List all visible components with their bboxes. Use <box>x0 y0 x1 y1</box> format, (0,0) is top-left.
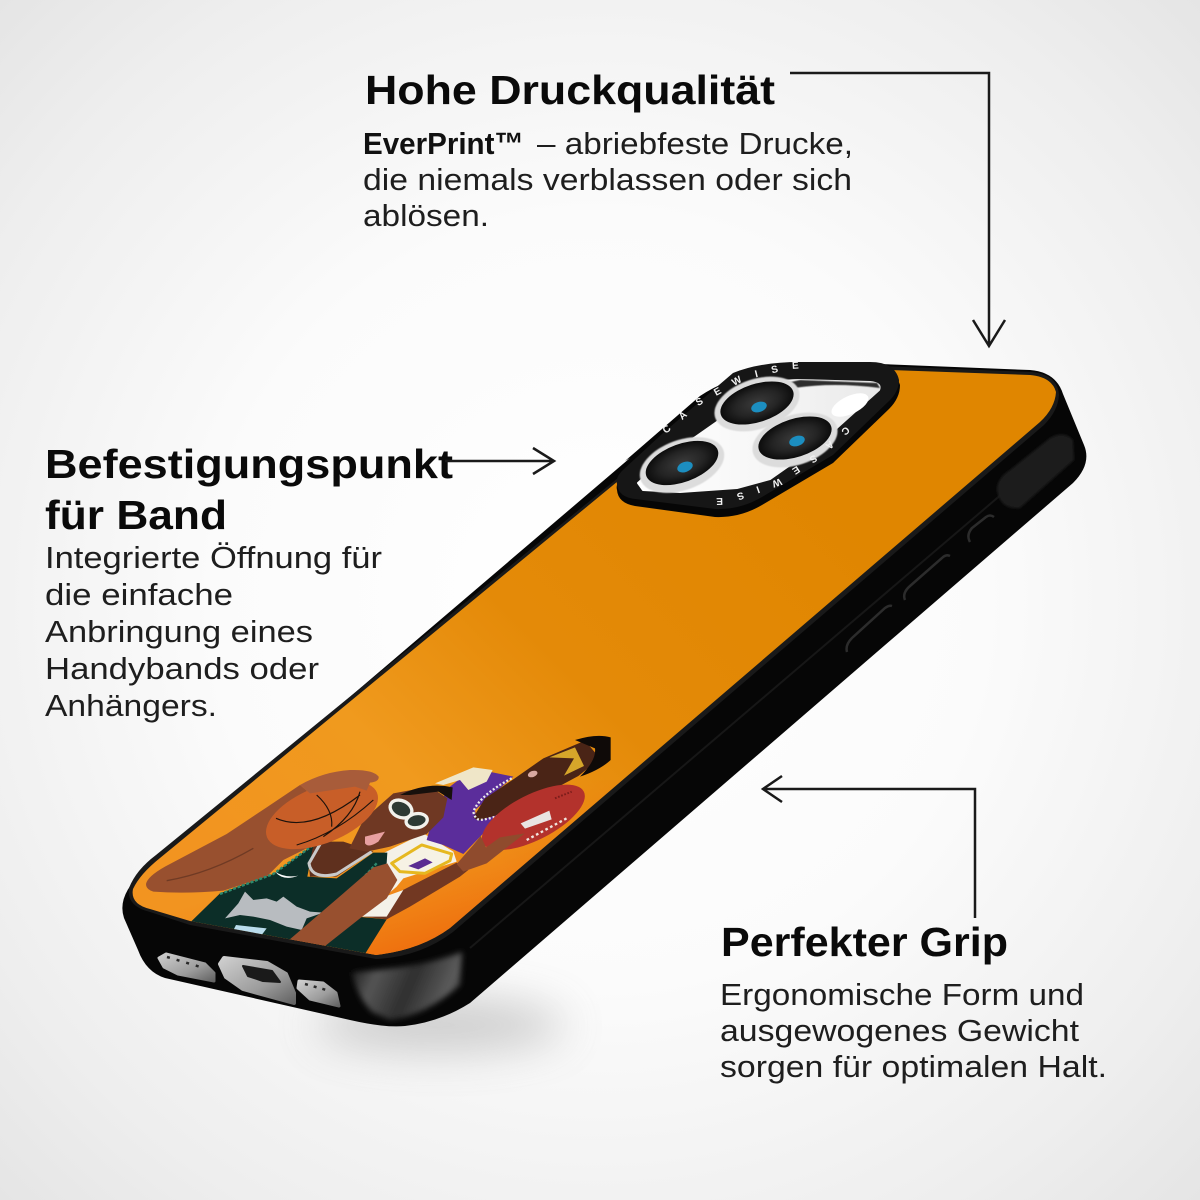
green jersey <box>190 845 387 941</box>
second player arm <box>363 863 468 919</box>
orange back panel <box>132 370 1056 955</box>
chest and neck <box>307 842 373 877</box>
back print <box>132 370 1056 955</box>
heading: Hohe Druckqualität <box>365 67 775 113</box>
callout: strap attachment <box>45 441 453 723</box>
body text: die einfache <box>45 577 233 612</box>
bezel logo top: CASEWISE <box>663 362 798 432</box>
body text: EverPrint™ <box>363 126 524 161</box>
purple jersey <box>426 772 514 854</box>
body text: ablösen. <box>363 198 489 233</box>
white sunglasses <box>387 797 428 829</box>
body text <box>45 540 382 723</box>
action button recess <box>997 434 1074 508</box>
side inner groove <box>470 470 1030 948</box>
callout: print quality <box>363 67 853 233</box>
jersey number patch <box>233 925 267 935</box>
lens left <box>632 426 732 504</box>
left hand <box>300 770 379 793</box>
basketball <box>266 784 378 850</box>
mouth <box>365 832 385 845</box>
volume button lower <box>847 606 892 652</box>
case body <box>122 362 1086 1026</box>
camera window <box>638 380 880 492</box>
phone shadow <box>315 999 565 1051</box>
body text: Anbringung eines <box>45 614 313 649</box>
bezel top <box>617 362 899 509</box>
heading: Perfekter Grip <box>721 919 1008 965</box>
football <box>482 784 585 850</box>
jersey trim <box>220 847 378 895</box>
glossy corner highlight <box>352 952 462 1020</box>
phone case <box>122 362 1086 1026</box>
second player white jersey <box>357 833 457 917</box>
arrow: to top edge <box>790 73 1005 346</box>
arm crease <box>167 848 253 881</box>
nike swoosh <box>275 872 298 878</box>
case rim around back <box>129 366 1059 959</box>
left player head <box>349 787 447 852</box>
port right speaker <box>298 981 339 1006</box>
volume button upper <box>904 555 950 600</box>
second player neck and head <box>473 741 600 821</box>
side button <box>968 516 994 542</box>
arrow: to side <box>763 776 975 918</box>
bezel logo bottom: CASEWISE <box>716 428 850 505</box>
body text <box>363 126 853 233</box>
right arm of left player <box>288 863 397 947</box>
port left speaker <box>159 954 214 981</box>
body text: Integrierte Öffnung für <box>45 540 382 575</box>
jersey number <box>392 845 452 873</box>
heading: für Band <box>45 492 227 538</box>
body text: sorgen für optimalen Halt. <box>720 1049 1107 1084</box>
body text: Anhängers. <box>45 688 217 723</box>
callout: grip <box>720 919 1107 1084</box>
jersey shoulder and number <box>435 767 493 790</box>
body text <box>720 977 1107 1084</box>
port charging <box>220 958 294 1003</box>
heading: Befestigungspunkt <box>45 441 453 487</box>
lens top <box>707 367 807 441</box>
artwork: two athletes <box>146 736 611 954</box>
body text: ausgewogenes Gewicht <box>720 1013 1079 1048</box>
chain necklace <box>472 777 512 821</box>
deep orange glow <box>229 780 622 955</box>
lens right <box>745 403 845 477</box>
arrow: to strap point <box>445 448 554 474</box>
jersey graphic <box>225 892 323 930</box>
football hand <box>457 833 525 872</box>
jersey number inner <box>408 858 433 869</box>
body text: Handybands oder <box>45 651 319 686</box>
body text: die niemals verblassen oder sich <box>363 162 852 197</box>
flash <box>828 388 872 422</box>
inner window dark top edge <box>740 380 880 402</box>
left player arm <box>146 785 317 893</box>
second player shorts <box>323 917 387 954</box>
body text: – abriebfeste Drucke, <box>537 126 853 161</box>
heading <box>45 441 453 538</box>
jersey collar <box>309 838 372 876</box>
gold glasses <box>549 747 584 776</box>
bezel shadow lip <box>617 369 900 517</box>
body text: Ergonomische Form und <box>720 977 1084 1012</box>
second player hair <box>575 736 611 777</box>
camera bezel <box>616 362 900 518</box>
left player hair <box>400 786 453 800</box>
second player mouth <box>528 770 538 778</box>
